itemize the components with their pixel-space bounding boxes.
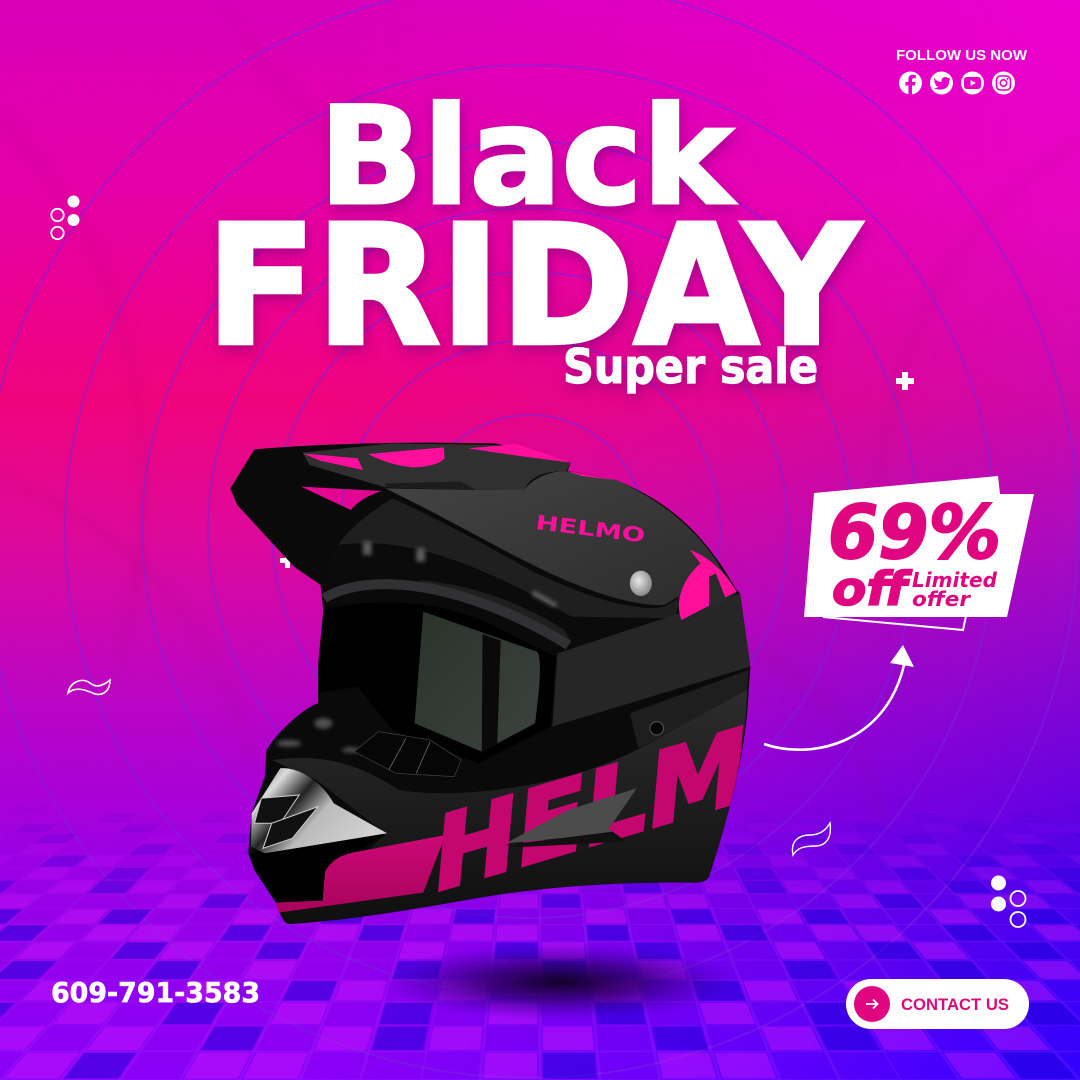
badge off: off [832, 562, 913, 616]
chin highlights [276, 718, 360, 753]
helmet floor shadow [380, 944, 740, 1020]
carbon brow strip [324, 584, 569, 645]
goggle strap [552, 593, 750, 727]
goggle frame [318, 602, 556, 763]
title line: FRIDAY: FRIDAY [206, 190, 862, 382]
social icons row [899, 72, 1015, 94]
decoration: dots top left [51, 196, 80, 239]
decoration: dots bottom right [991, 876, 1026, 927]
band highlights [363, 542, 557, 608]
pink skirt block [276, 835, 446, 913]
helmet glossy band [323, 543, 675, 648]
button label: CONTACT US [901, 996, 1009, 1014]
chin vent [354, 732, 461, 777]
goggle lens [415, 612, 540, 752]
mouth vent details [254, 795, 318, 848]
title [206, 78, 862, 395]
visor ridge [385, 482, 477, 490]
contact button [846, 979, 1029, 1029]
chrome mouth vent [251, 768, 387, 853]
icon: twitter [930, 72, 953, 94]
helmet visor logo text: HELMO [534, 510, 646, 547]
lens centre bar [482, 634, 501, 752]
badge 69%: 69% [828, 490, 1001, 576]
subtitle: Super sale: Super sale [563, 340, 818, 395]
helmet visor bolt [630, 571, 652, 596]
matte panel under strap [630, 670, 749, 748]
visor top [303, 443, 571, 490]
decoration: squiggle right [792, 823, 830, 855]
badge back sheet outline [823, 616, 966, 630]
button arrow icon [854, 986, 890, 1022]
visor pink graphics [303, 444, 616, 480]
discount badge [804, 476, 1034, 630]
strap snap [650, 722, 664, 735]
badge main card [804, 476, 1034, 617]
black nose [249, 835, 385, 903]
phone number: 609-791-3583 [51, 976, 260, 1009]
arrow to badge [764, 645, 914, 750]
helmet [230, 443, 752, 924]
icon: instagram [992, 72, 1015, 94]
follow us heading: FOLLOW US NOW [896, 48, 1027, 64]
helmet dome [385, 471, 737, 620]
helmet lower shell [272, 690, 747, 924]
helmet silhouette [230, 443, 750, 924]
side vent [506, 788, 637, 847]
decoration: plus behind helmet [280, 553, 295, 568]
title line: Black: Black [319, 78, 736, 235]
icon: facebook [899, 72, 922, 94]
helmet shell under visor [337, 498, 681, 643]
pink brand lettering: HELM [428, 704, 752, 918]
badge offer: offer [912, 587, 971, 611]
icon: youtube [961, 72, 984, 94]
floor: perspective checker tiles [0, 817, 1080, 1080]
decoration: plus right [896, 372, 914, 390]
badge limited: Limited [912, 568, 998, 592]
side dome pink logo [679, 550, 737, 620]
decoration: squiggle left [68, 680, 110, 694]
